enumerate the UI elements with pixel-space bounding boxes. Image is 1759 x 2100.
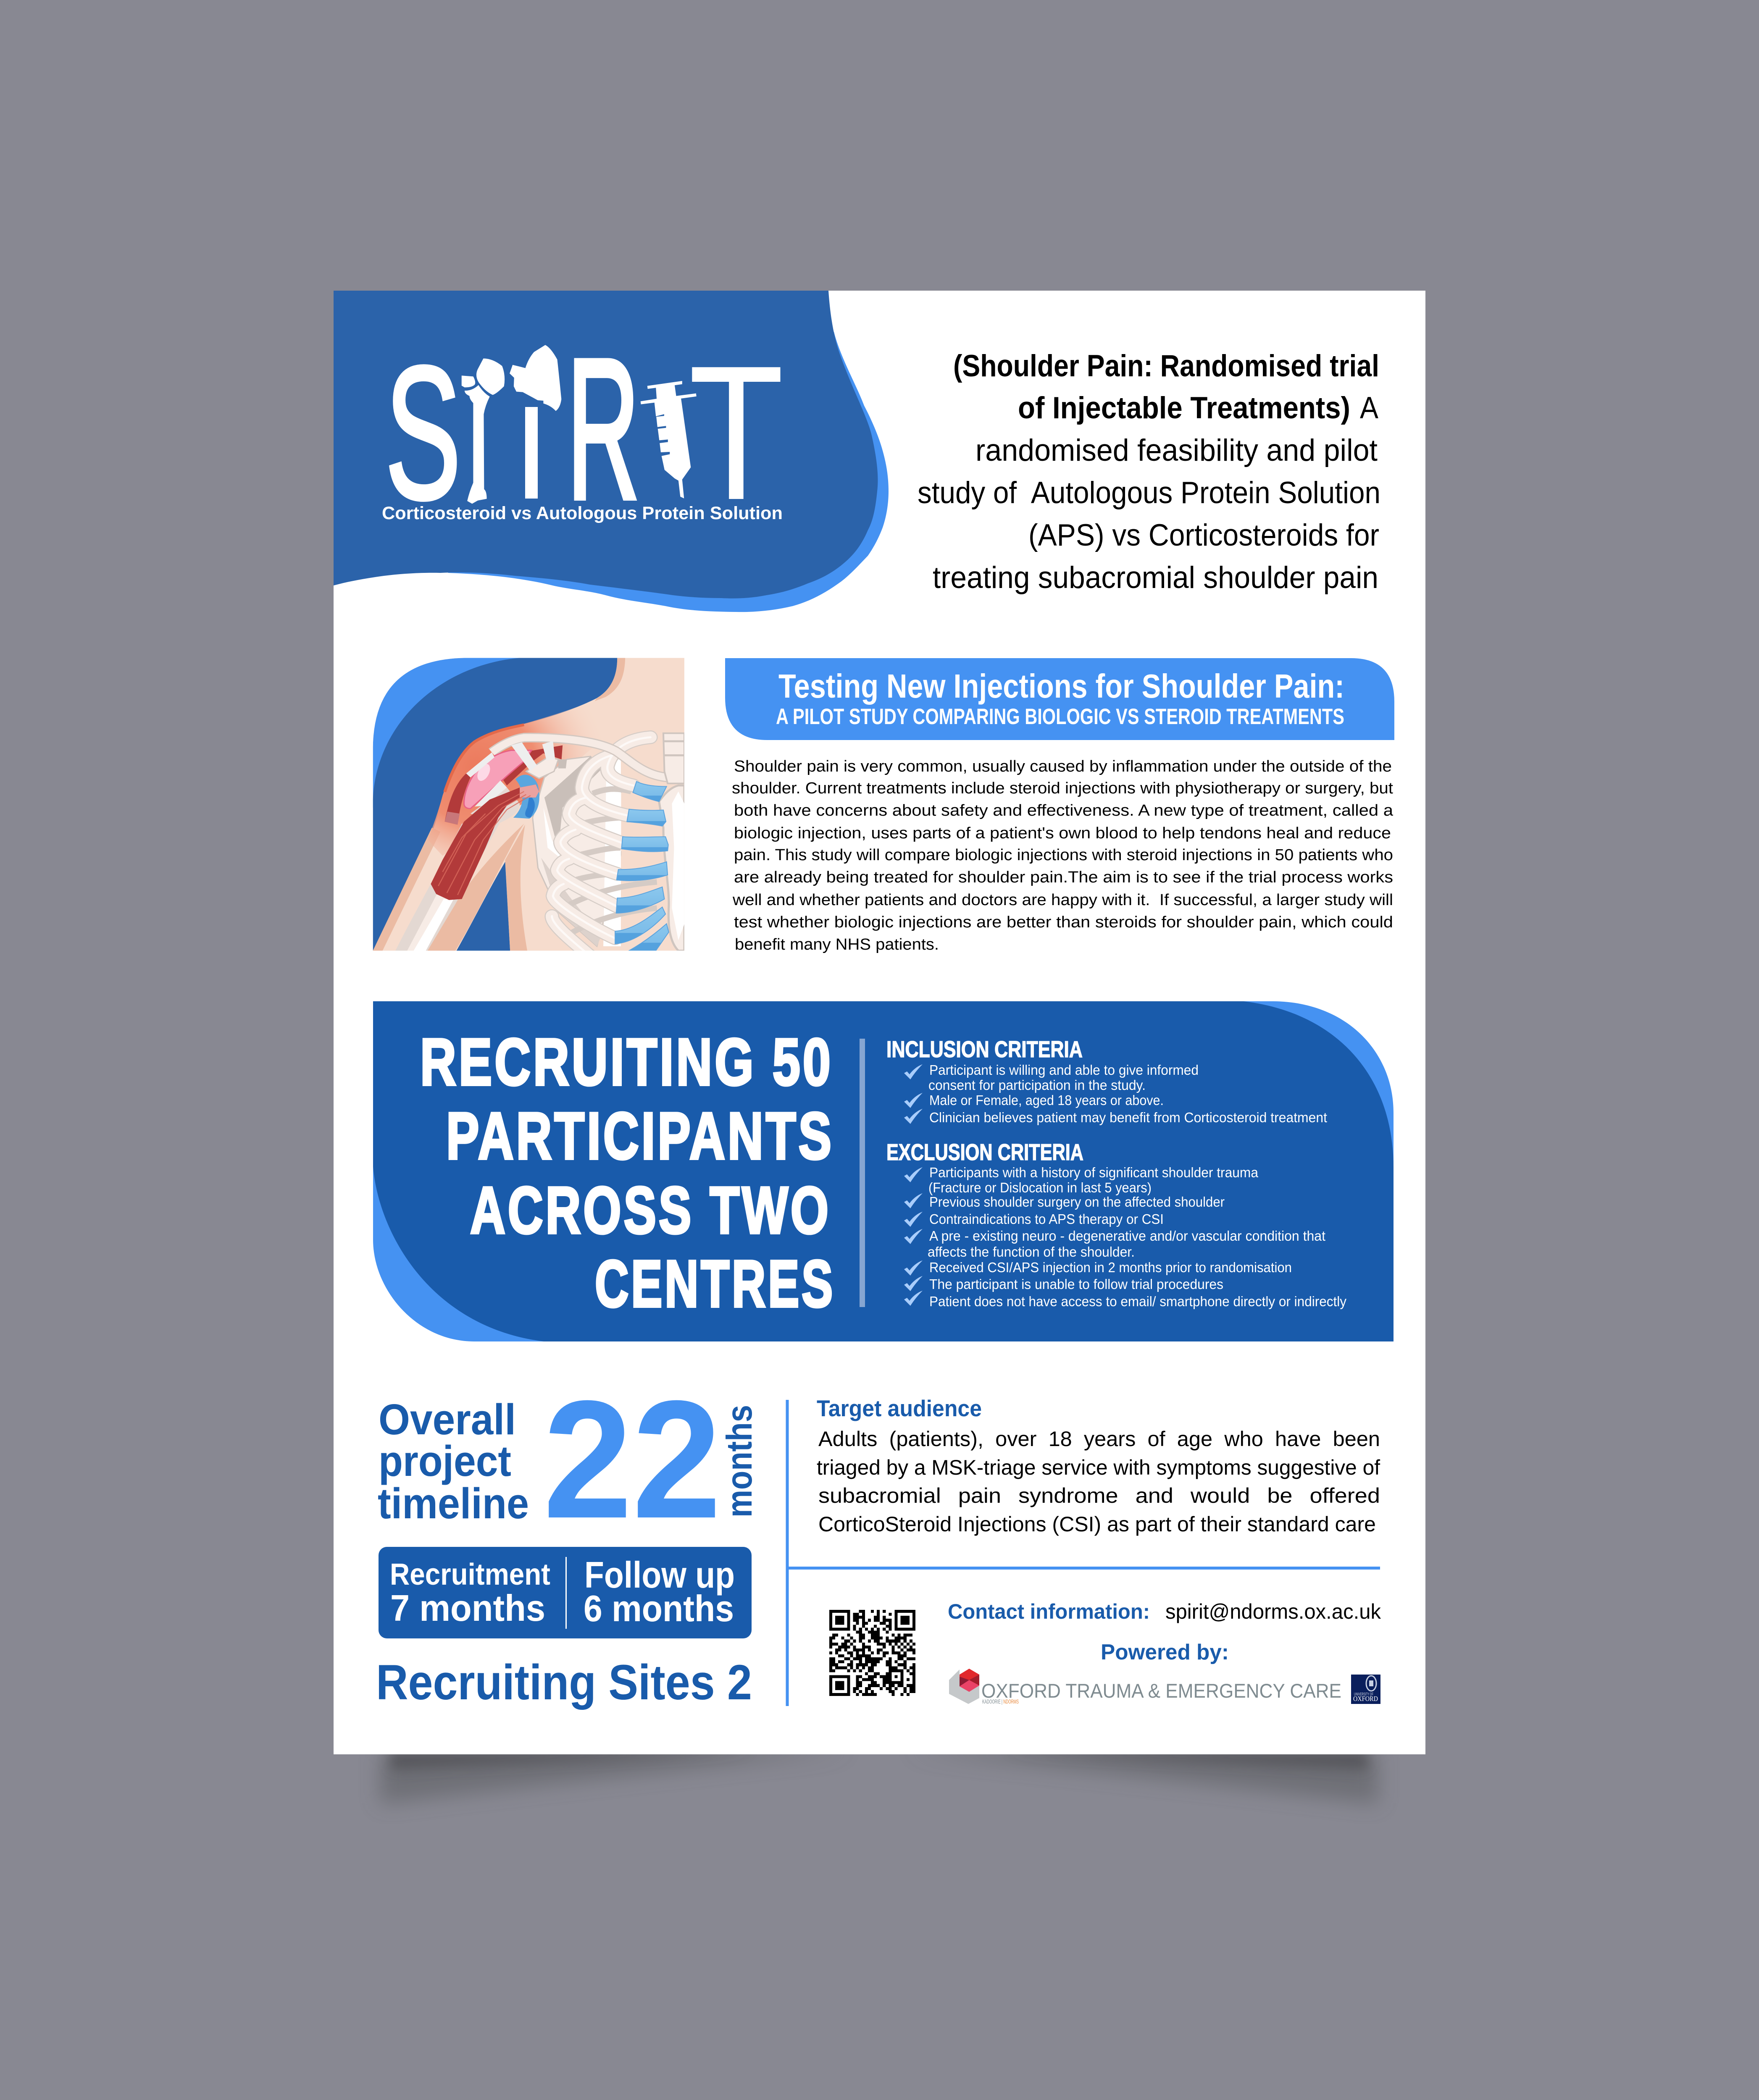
rib cartilage (615, 782, 669, 950)
overall project timeline label: timeline (378, 1479, 529, 1528)
powered by label: Powered by: (1101, 1640, 1229, 1664)
contact information (948, 1600, 1381, 1623)
big number 22: 22 (543, 1365, 721, 1553)
skin shading (373, 658, 625, 950)
scapula (532, 756, 621, 948)
overall project timeline label (378, 1395, 529, 1528)
inclusion criteria: consent for participation in the study. (928, 1077, 1146, 1093)
recruitment and follow-up box: 6 months (584, 1588, 734, 1629)
description paragraph: well and whether patients and doctors are happy with it. If successful, a larger study will (732, 891, 1393, 909)
recruitment and follow-up box (379, 1547, 752, 1638)
description paragraph: are already being treated for shoulder pain.The aim is to see if the trial process works (734, 869, 1393, 886)
ribs (552, 737, 650, 956)
exclusion criteria: The participant is unable to follow trial procedures (929, 1276, 1223, 1292)
joint cartilage (513, 775, 539, 819)
blue backdrop (373, 658, 617, 950)
recruiting headline: PARTICIPANTS (446, 1099, 834, 1173)
logo subtitle: Corticosteroid vs Autologous Protein Solution (382, 503, 783, 523)
panel: recruiting and criteria (373, 1001, 1394, 1341)
contact information: Contact information: (948, 1600, 1150, 1623)
exclusion criteria (886, 1139, 1346, 1309)
back ribs (567, 789, 657, 934)
description paragraph: biologic injection, uses parts of a patient's own blood to help tendons heal and reduce (734, 824, 1391, 842)
logo: SPIRIT wordmark (382, 317, 784, 541)
title text: (APS) vs Corticosteroids for (1028, 518, 1379, 552)
inclusion criteria: INCLUSION CRITERIA (886, 1036, 1083, 1062)
description paragraph: shoulder. Current treatments include steroid injections with physiotherapy or surgery, but (732, 780, 1393, 797)
section divider lines (786, 1400, 1380, 1706)
icon: hexagon mark (949, 1669, 979, 1704)
title text: treating subacromial shoulder pain (933, 561, 1378, 595)
panel: header wave (334, 291, 889, 612)
panel dark blue body (373, 1001, 1394, 1341)
humerus (395, 788, 520, 950)
illustration: shoulder anatomy (373, 658, 684, 956)
kadoorie ndorms label: KADOORIE | NDORMS (982, 1698, 1019, 1705)
deltoid muscle (431, 785, 539, 900)
target audience body text: CorticoSteroid Injections (CSI) as part of their standard care (818, 1512, 1376, 1536)
target audience body text: triaged by a MSK-triage service with symptoms suggestive of (817, 1456, 1380, 1479)
icon: bones (462, 345, 561, 504)
exclusion criteria: Received CSI/APS injection in 2 months prior to randomisation (929, 1260, 1292, 1275)
exclusion criteria: A pre - existing neuro - degenerative and/or vascular condition that (929, 1228, 1325, 1244)
overall project timeline label: project (379, 1437, 511, 1485)
exclusion criteria: Previous shoulder surgery on the affected shoulder (929, 1194, 1225, 1210)
exclusion criteria: Participants with a history of significant shoulder trauma (929, 1165, 1259, 1180)
subheading text: A PILOT STUDY COMPARING BIOLOGIC VS STEROID TREATMENTS (776, 704, 1344, 729)
exclusion criteria: affects the function of the shoulder. (928, 1244, 1135, 1260)
contact information: spirit@ndorms.ox.ac.uk (1165, 1600, 1381, 1623)
overall project timeline label: Overall (379, 1395, 516, 1444)
target audience (817, 1395, 1380, 1536)
title text: (Shoulder Pain: Randomised trial (953, 349, 1379, 383)
description paragraph: benefit many NHS patients. (735, 936, 939, 953)
logo letter R: R (567, 317, 639, 541)
recruiting headline: RECRUITING 50 (420, 1025, 833, 1099)
recruiting sites: Recruiting Sites 2 (376, 1655, 752, 1710)
description paragraph: Shoulder pain is very common, usually caused by inflammation under the outside of the (734, 758, 1392, 775)
exclusion criteria: (Fracture or Dislocation in last 5 years) (928, 1180, 1152, 1195)
logo letter I (525, 407, 538, 499)
title text: study of Autologous Protein Solution (918, 476, 1380, 510)
target audience body text: subacromial pain syndrome and would be offered (818, 1484, 1380, 1507)
paper shadow (380, 1751, 1378, 1804)
rotated months label: months (720, 1405, 760, 1517)
logo wordmark: OXFORD TRAUMA & EMERGENCY CARE (981, 1680, 1341, 1702)
exclusion criteria: Patient does not have access to email/ smartphone directly or indirectly (929, 1294, 1346, 1309)
title text (918, 349, 1380, 595)
icon: check marks (904, 1064, 923, 1306)
title text: randomised feasibility and pilot (975, 433, 1378, 467)
light blue wave (448, 332, 889, 612)
title text: A (1360, 391, 1378, 425)
recruiting headline: CENTRES (595, 1247, 835, 1321)
icon: syringe (641, 381, 697, 499)
target audience body text (817, 1427, 1380, 1536)
recruitment and follow-up box: Recruitment (390, 1558, 550, 1591)
panel light blue accent (373, 1001, 1394, 1341)
logo: Oxford Trauma and Emergency Care (949, 1669, 1341, 1705)
description paragraph: both have concerns about safety and effectiveness. A new type of treatment, called a (734, 802, 1394, 819)
inclusion criteria: Clinician believes patient may benefit from Corticosteroid treatment (929, 1110, 1327, 1125)
dark blue wave (334, 291, 878, 598)
title text: of Injectable Treatments) (1018, 391, 1350, 425)
recruiting headline (420, 1025, 835, 1321)
target audience body text: Adults (patients), over 18 years of age who have been (818, 1427, 1380, 1451)
QR code (829, 1610, 915, 1696)
exclusion criteria: EXCLUSION CRITERIA (886, 1139, 1083, 1165)
heading text: Testing New Injections for Shoulder Pain: (778, 667, 1344, 705)
recruitment and follow-up box: 7 months (390, 1587, 545, 1629)
exclusion criteria: Contraindications to APS therapy or CSI (929, 1211, 1164, 1227)
acromion and ligaments (445, 741, 567, 824)
logo: University of Oxford: UNIVERSITY OF (1354, 1692, 1373, 1697)
recruiting headline: ACROSS TWO (470, 1173, 831, 1247)
logo: University of Oxford: OXFORD (1353, 1695, 1378, 1703)
panel: project timeline (376, 1365, 760, 1710)
inclusion criteria: Participant is willing and able to give informed (929, 1062, 1199, 1078)
description paragraph: test whether biologic injections are better than steroids for shoulder pain, which could (734, 914, 1393, 931)
description paragraph (732, 758, 1394, 953)
logo letter T: T (689, 326, 784, 540)
recruitment and follow-up box: Follow up (584, 1554, 735, 1596)
logo letter S: S (385, 327, 461, 538)
clavicle (492, 738, 668, 777)
description paragraph: pain. This study will compare biologic injections with steroid injections in 50 patients who (734, 846, 1393, 864)
vertical divider (860, 1039, 865, 1307)
inclusion criteria: Male or Female, aged 18 years or above. (929, 1092, 1164, 1108)
poster page (334, 291, 1425, 1754)
spine and sternum (659, 733, 684, 950)
heading banner (725, 658, 1394, 740)
target audience: Target audience (817, 1395, 982, 1421)
logo: University of Oxford (1351, 1675, 1380, 1704)
inclusion criteria (886, 1036, 1327, 1125)
